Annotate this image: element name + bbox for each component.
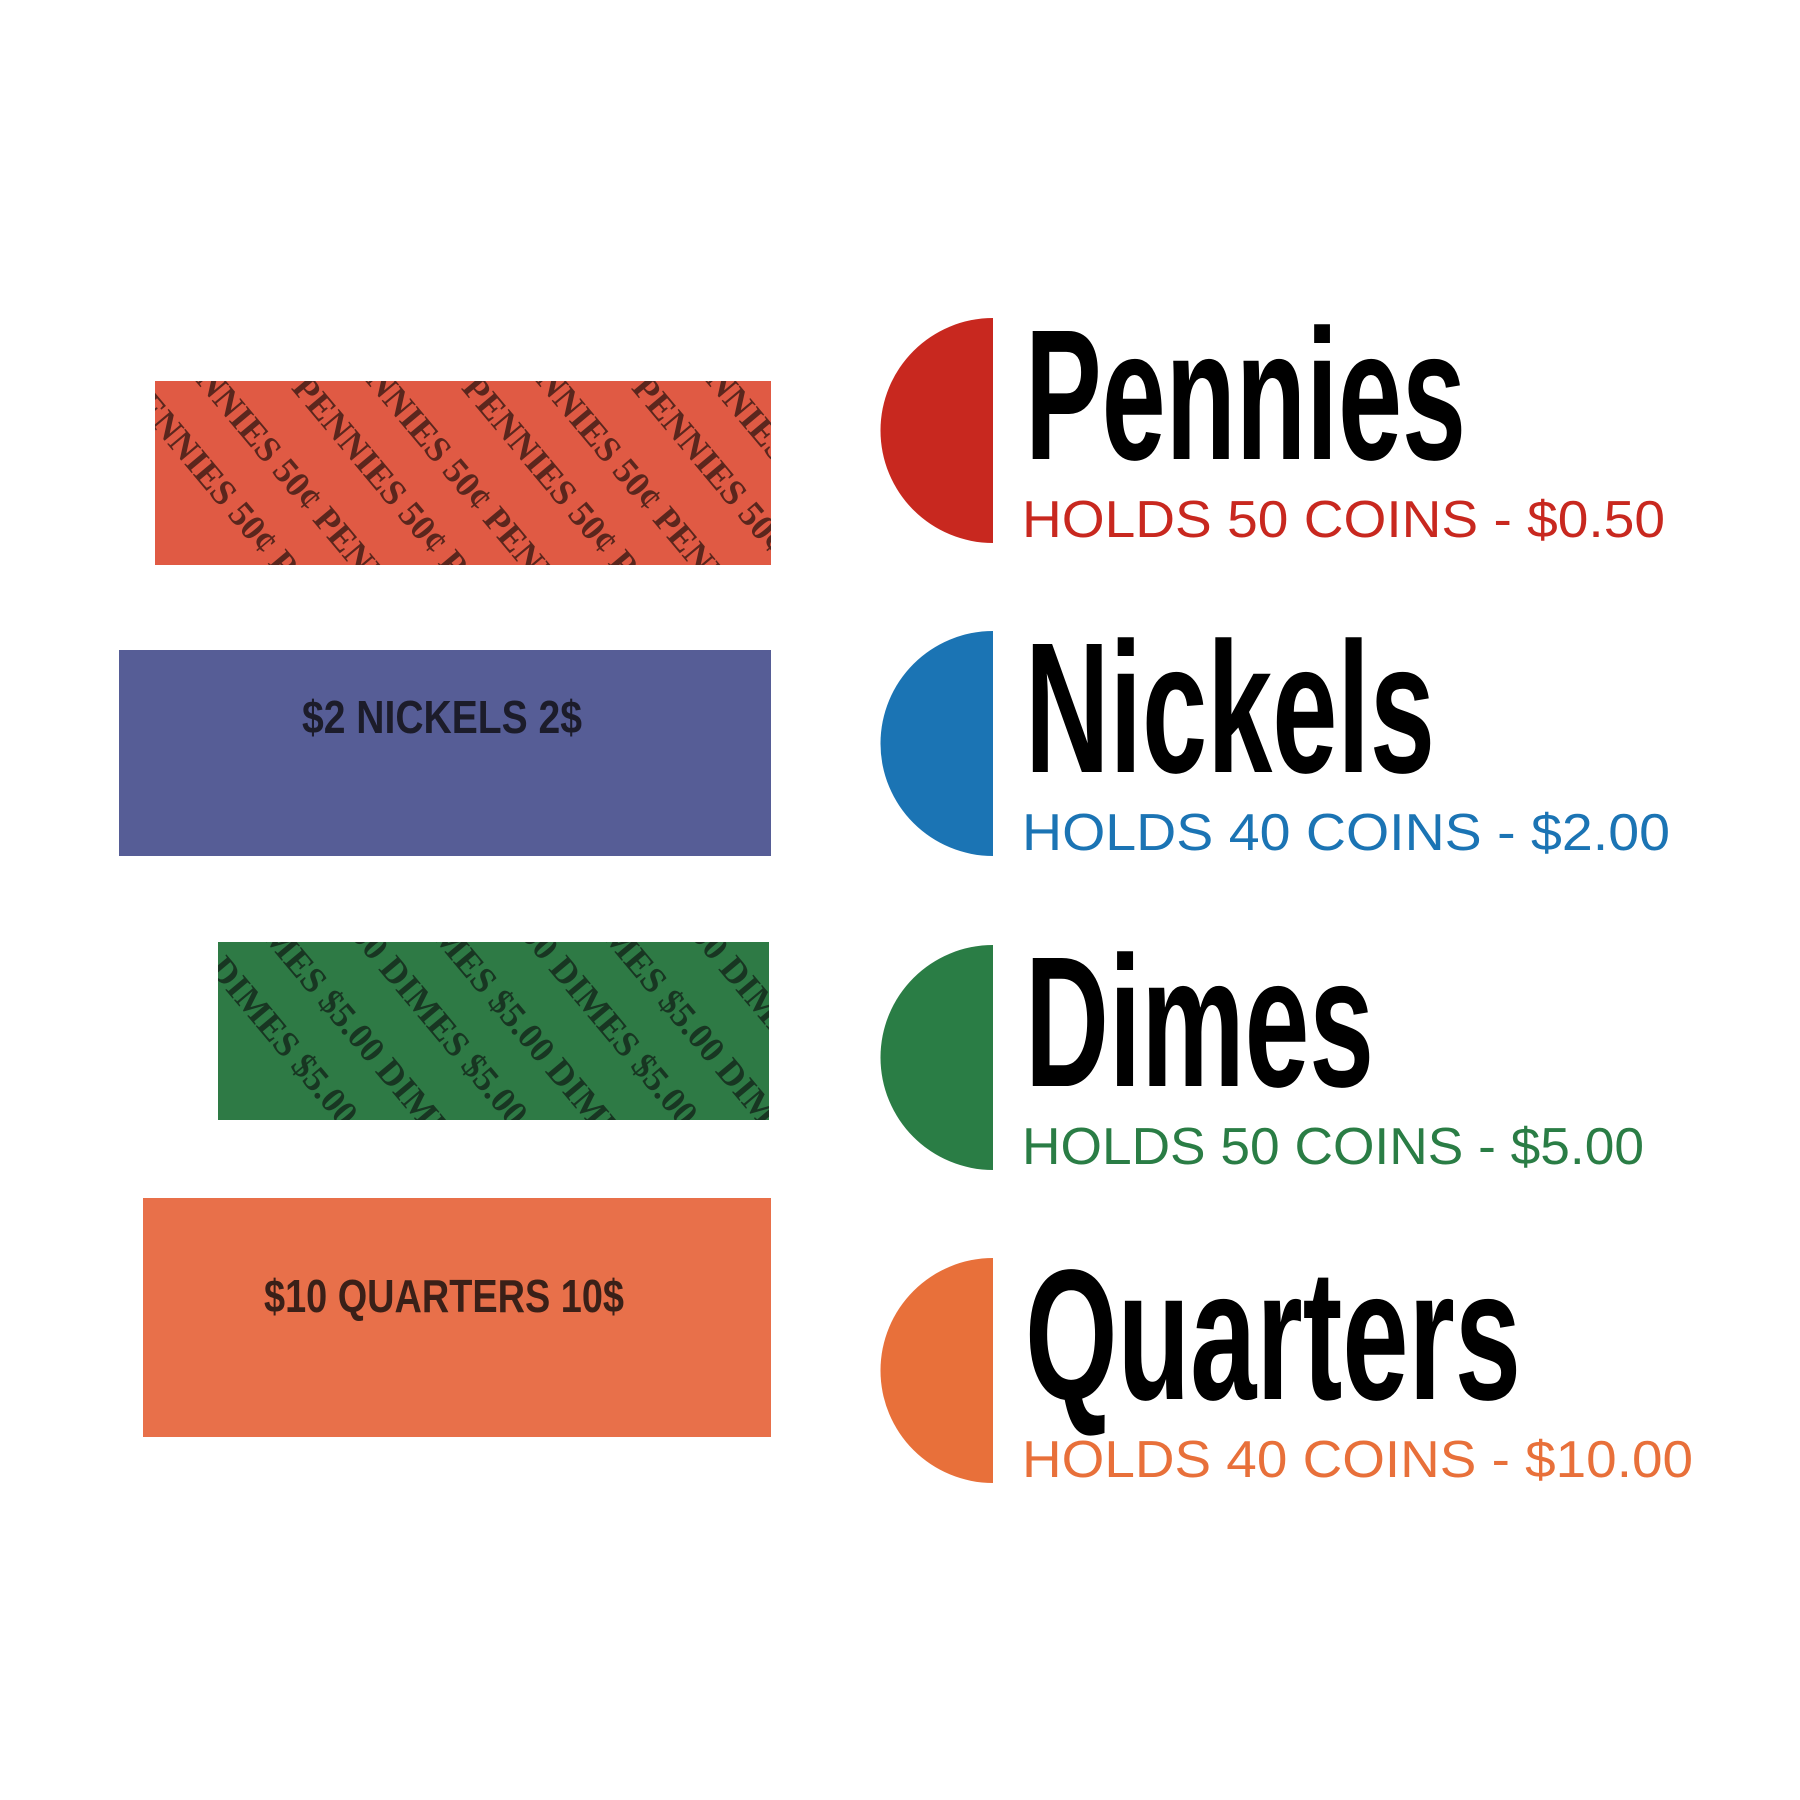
- wrapper: pennies: 50¢ PENNIES 50¢ PENNIES: [74, 319, 392, 688]
- wrapper: pennies: PENNIES 50¢ PENNIES 50¢: [329, 324, 647, 693]
- row: pennies label: [880, 292, 1665, 549]
- row: nickels label: [880, 605, 1670, 862]
- wrapper: nickels: [119, 650, 771, 856]
- wrapper: dimes: $5.00 DIMES $5.00 DIMES: [484, 879, 788, 1231]
- wrapper: dimes: DIMES $5.00 DIMES: [399, 884, 645, 1167]
- row: nickels label: Nickels: [1025, 605, 1435, 812]
- wrapper: pennies: PENNIES 50¢ PENNIES 50¢: [499, 324, 817, 693]
- row: quarters label: Quarters: [1025, 1232, 1521, 1439]
- wrapper: pennies: PENNIES 50¢ PENNIES 50¢: [159, 324, 477, 693]
- wrapper: dimes: $5.00 DIMES $5.00: [654, 879, 876, 1133]
- wrapper: pennies: 50¢ PENNIES 50¢ PENNIES: [244, 319, 562, 688]
- row: pennies label: Pennies: [1025, 292, 1466, 499]
- row: dimes label: HOLDS 50 COINS - $5.00: [1022, 1118, 1644, 1176]
- row: nickels label: HOLDS 40 COINS - $2.00: [1022, 804, 1670, 862]
- wrapper: quarters: [143, 1198, 771, 1437]
- row: dimes label: [880, 919, 1644, 1176]
- wrapper: dimes: [218, 942, 769, 1120]
- wrapper: pennies: 50¢ PENNIES 50¢ PENNIES: [584, 319, 902, 688]
- wrapper: dimes: DIMES $5.00 DIMES: [569, 884, 815, 1167]
- wrapper: dimes: DIMES $5.00 DIMES: [229, 884, 475, 1167]
- wrapper: pennies: 50¢ PENNIES 50¢ PENNIES: [414, 319, 732, 688]
- wrapper: nickels: $2 NICKELS 2$: [302, 691, 582, 743]
- wrapper: pennies: PENNIES 50¢ PENNIES: [669, 324, 946, 644]
- row: dimes label: Dimes: [1025, 919, 1374, 1126]
- row: pennies label: HOLDS 50 COINS - $0.50: [1022, 491, 1665, 549]
- row: quarters label: [880, 1232, 1693, 1489]
- wrapper: dimes: DIMES $5.00: [739, 884, 903, 1070]
- wrapper: dimes: $5.00 DIMES $5.00 DIMES: [144, 879, 448, 1231]
- row: quarters label: HOLDS 40 COINS - $10.00: [1022, 1431, 1693, 1489]
- wrapper: quarters: $10 QUARTERS 10$: [264, 1270, 624, 1322]
- wrapper: pennies: 50¢ PENNIES: [754, 319, 925, 513]
- wrapper: pennies: [155, 381, 771, 565]
- wrapper: dimes: $5.00 DIMES $5.00 DIMES: [314, 879, 618, 1231]
